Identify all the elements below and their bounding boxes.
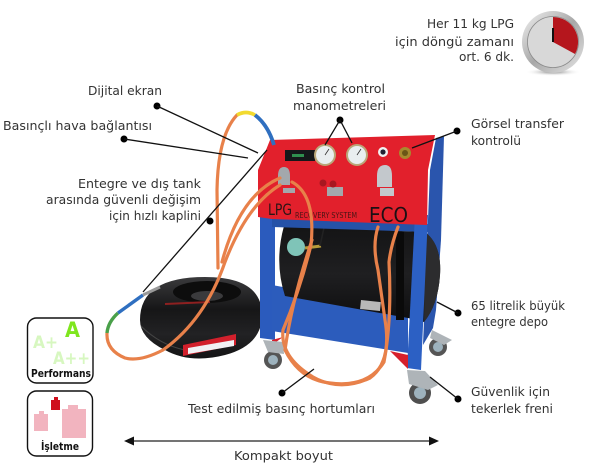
leader: wheel brake [430, 377, 462, 402]
panel lettering: RECOVERY SYSTEM [295, 211, 357, 220]
leader: quick coupling [143, 150, 267, 292]
label: manometers [293, 81, 386, 113]
leader: visual transfer [412, 128, 460, 148]
label: wheel brake [471, 384, 553, 416]
blue machine frame [260, 136, 444, 353]
label: compact size: Kompakt boyut [234, 448, 333, 463]
panel lettering [268, 200, 408, 227]
text: cycle time: için döngü zamanı [395, 34, 514, 49]
leader: tank [437, 302, 462, 316]
label: quick coupling: arasında güvenli değişim [46, 192, 201, 207]
label: hoses: Test edilmiş basınç hortumları [187, 401, 375, 416]
panel: operation: İşletme [41, 439, 79, 453]
panel: performance: A+ [33, 333, 58, 353]
panel: performance: A++ [53, 349, 90, 369]
label: quick coupling: için hızlı kaplini [109, 208, 201, 223]
text: cycle time: ort. 6 dk. [459, 49, 514, 64]
pressure hoses [107, 112, 398, 385]
label: quick coupling [46, 176, 202, 223]
panel: performance: A [65, 318, 81, 342]
brackets and valves [278, 165, 394, 196]
label: manometers: manometreleri [293, 98, 386, 113]
label: visual transfer: kontrolü [471, 133, 521, 148]
caster wheels [263, 330, 452, 404]
label: visual transfer: Görsel transfer [471, 116, 565, 131]
panel lettering: LPG [268, 200, 292, 219]
digital display [285, 150, 315, 161]
text: cycle time: Her 11 kg LPG [427, 16, 514, 31]
visual transfer control [378, 147, 411, 159]
label: manometers: Basınç kontrol [296, 81, 385, 96]
blue right post, top bar and red braces [272, 215, 428, 370]
leader: manometers [325, 116, 352, 145]
label: quick coupling: Entegre ve dış tank [78, 176, 202, 191]
label: tank: 65 litrelik büyük [471, 298, 566, 313]
text: cycle time [395, 16, 514, 64]
icon: cycle time gauge [522, 11, 584, 76]
label: wheel brake: Güvenlik için [471, 384, 550, 399]
panel lettering: ECO [369, 203, 408, 227]
arrow: compact size [124, 436, 439, 446]
label: tank [471, 298, 566, 329]
label: tank: entegre depo [471, 314, 548, 329]
pressure gauges [314, 144, 368, 166]
leader: digital display [154, 102, 258, 153]
red control panel [258, 135, 435, 227]
panel: operation [28, 391, 92, 456]
panel: performance: Performans [31, 368, 91, 380]
label: wheel brake: tekerlek freni [471, 401, 553, 416]
leader: hoses [278, 369, 314, 396]
panel: performance [28, 318, 93, 383]
inner LPG tank [279, 223, 440, 322]
label: compressed air: Basınçlı hava bağlantısı [3, 118, 152, 133]
leader: compressed air [120, 136, 248, 158]
label: digital display: Dijital ekran [88, 83, 162, 98]
label: visual transfer [471, 116, 565, 148]
toroidal external tank [140, 277, 262, 359]
